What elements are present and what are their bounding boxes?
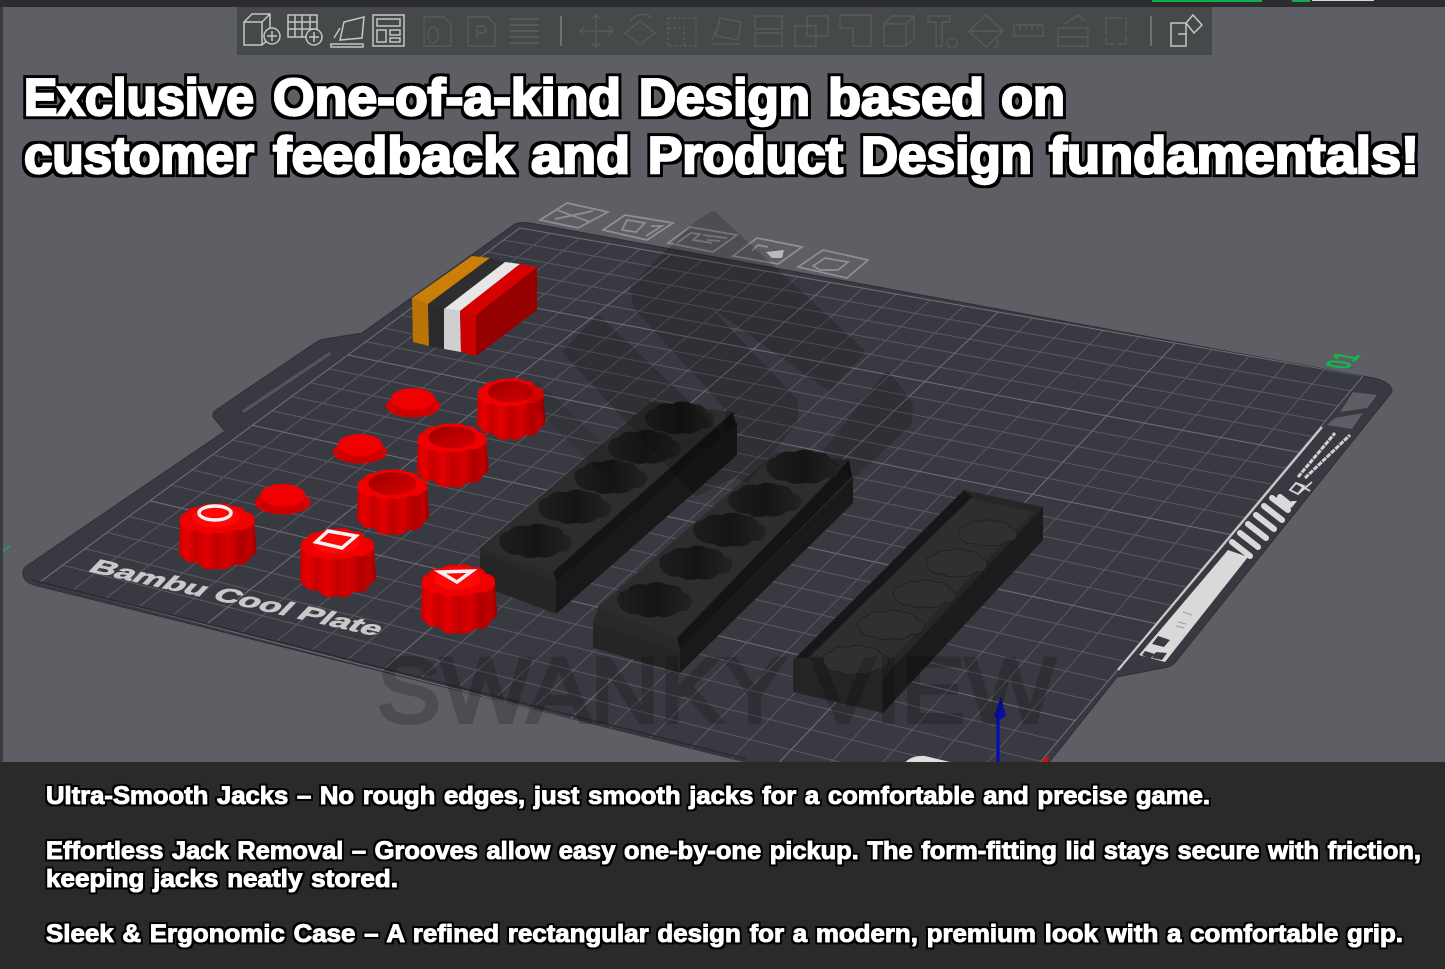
left window edge <box>0 0 3 765</box>
flat button 1 <box>386 388 440 418</box>
description text <box>46 782 1421 948</box>
toolbar assembly icon <box>1171 15 1202 46</box>
watermark logo <box>528 215 909 492</box>
title line 1: Exclusive <box>24 69 254 127</box>
axis gizmo <box>903 696 1049 765</box>
title line 2: and <box>531 127 630 185</box>
multicolour case block <box>412 256 537 356</box>
plate right strip <box>1118 427 1350 670</box>
plate label: Bambu Cool Plate: Bambu Cool Plate <box>83 555 391 640</box>
stripe: white <box>444 309 461 352</box>
title line 2: customer <box>24 127 254 185</box>
plate outline <box>23 223 1392 765</box>
watermark text: SWANKY VIEW <box>377 640 1055 742</box>
jack with triangle <box>421 564 497 634</box>
title <box>24 69 1419 185</box>
flat button 2 <box>333 434 387 464</box>
stripe: black <box>428 304 444 349</box>
hollow jack 3 <box>357 469 429 535</box>
plate front edge shadow <box>32 580 746 759</box>
title line 1: on <box>1001 69 1065 127</box>
stripe: red <box>460 311 476 356</box>
green plate number 01: 01 <box>1316 350 1368 371</box>
tray 1 cavities <box>499 402 715 558</box>
feature: effortless jack removal: Effortless Jack Removal – Grooves allow easy one-by-one pickup. The form-fitting lid stays secure with friction, <box>46 837 1421 865</box>
tray 1: lid <box>480 402 737 614</box>
plate cutouts <box>1327 392 1377 429</box>
title line 1 <box>24 69 1065 127</box>
toolbar disabled icons <box>424 14 1126 48</box>
plate handle slot <box>244 354 329 411</box>
title line 1: One-of-a-kind <box>273 69 621 127</box>
green status marks <box>1152 0 1374 2</box>
red pieces <box>179 378 546 634</box>
toolbar separators <box>561 16 1151 46</box>
toolbar <box>237 7 1212 55</box>
title line 2 <box>24 127 1419 185</box>
tray 3 moulded bumps <box>823 520 1017 675</box>
hollow jack 1 <box>477 378 546 440</box>
tray 2 cavities <box>617 450 839 617</box>
bottom description panel <box>0 762 1445 969</box>
stripe: orange <box>412 298 429 346</box>
jack with square <box>300 528 376 597</box>
plate top icons <box>540 203 868 278</box>
green axis tick <box>3 546 10 551</box>
feature: ultra-smooth jacks: Ultra-Smooth Jacks – No rough edges, just smooth jacks for a comfortable and precise game. <box>46 782 1210 810</box>
feature: sleek and ergonomic case: Sleek & Ergonomic Case – A refined rectangular design for a modern, premium look with a comfortable grip. <box>46 920 1403 948</box>
tray 2: lid with grooves <box>593 450 853 673</box>
flat button 3 <box>255 484 311 514</box>
title line 1: Design <box>639 69 810 127</box>
title line 2: fundamentals! <box>1049 127 1419 185</box>
plate grid major lines <box>40 228 1364 762</box>
tray 3: open base <box>793 490 1043 713</box>
title line 1: based <box>828 69 984 127</box>
top window bar <box>0 0 1445 7</box>
viewport background <box>0 0 1445 769</box>
title line 2: feedback <box>273 127 514 185</box>
title line 2: Product <box>648 127 843 185</box>
hollow jack 2 <box>417 423 489 488</box>
title line 2: Design <box>861 127 1032 185</box>
toolbar active icons <box>244 14 404 47</box>
feature: effortless jack removal, second line: keeping jacks neatly stored. <box>46 865 398 893</box>
plate grid <box>40 228 1364 762</box>
jack with circle <box>179 503 257 570</box>
plate bed <box>22 202 1392 762</box>
